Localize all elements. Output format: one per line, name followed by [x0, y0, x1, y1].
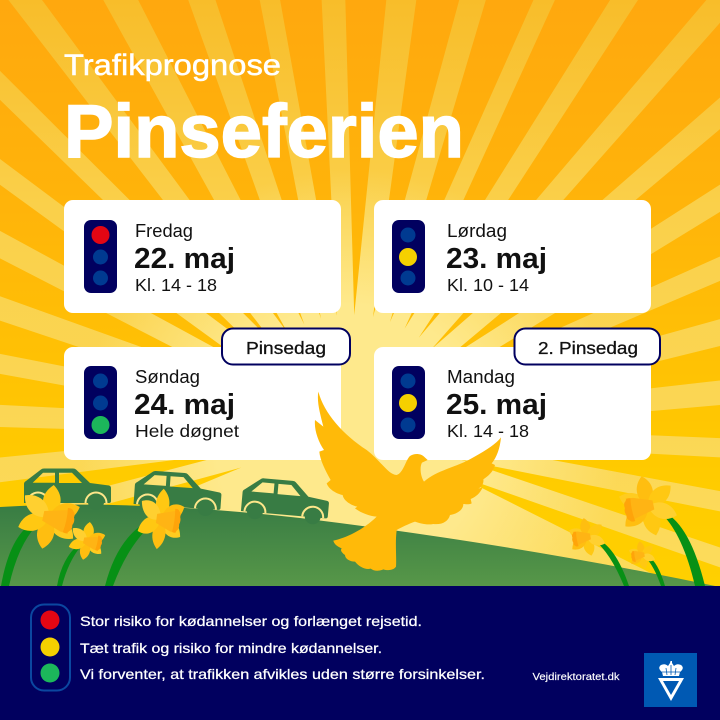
panel: Mandag 25. maj: Kl. 14 - 18 — [447, 421, 529, 441]
panel: Søndag 24. maj: 24. maj — [134, 389, 235, 421]
daffodils right — [565, 470, 705, 586]
panel: Fredag 22. maj: Fredag — [135, 221, 193, 241]
hill — [0, 505, 720, 587]
legend text: Tæt trafik og risiko for mindre kødannelser. — [80, 640, 382, 656]
panel: Lørdag 23. maj: Lørdag — [447, 221, 507, 241]
tag: 2. Pinsedag — [514, 328, 660, 364]
tag: Pinsedag: Pinsedag — [246, 338, 326, 358]
legend text: Stor risiko for kødannelser og forlænget rejsetid. — [80, 613, 422, 629]
bottom legend band — [0, 586, 720, 720]
panel: Lørdag 23. maj: Kl. 10 - 14 — [447, 275, 529, 295]
tag: 2. Pinsedag: 2. Pinsedag — [538, 338, 638, 358]
panel: Lørdag 23. maj: 23. maj — [446, 243, 547, 275]
traffic light: red — [84, 220, 117, 293]
traffic light: yellow — [392, 366, 425, 439]
panel: Søndag 24. maj: Søndag — [135, 367, 200, 387]
logo — [644, 653, 697, 707]
panel: Lørdag 23. maj — [374, 200, 651, 313]
car 1 — [24, 468, 111, 510]
website: Vejdirektoratet.dk — [532, 671, 620, 683]
panel: Fredag 22. maj: Kl. 14 - 18 — [135, 275, 217, 295]
panel: Mandag 25. maj: 25. maj — [446, 389, 547, 421]
panel: Søndag 24. maj: Hele døgnet — [135, 421, 239, 441]
panel: Fredag 22. maj — [64, 200, 341, 313]
traffic light: yellow — [392, 220, 425, 293]
tag: Pinsedag — [222, 328, 350, 364]
car 2 — [133, 470, 223, 517]
traffic light: green — [84, 366, 117, 439]
title: Trafikprognose: Trafikprognose — [64, 49, 281, 82]
panel: Søndag 24. maj — [64, 347, 341, 460]
car 3 — [240, 477, 331, 526]
legend text: Vi forventer, at trafikken afvikles uden større forsinkelser. — [80, 666, 485, 682]
daffodils left — [1, 479, 190, 586]
panel: Mandag 25. maj: Mandag — [447, 367, 515, 387]
panel: Mandag 25. maj — [374, 347, 651, 460]
title: Pinseferien: Pinseferien — [64, 89, 464, 173]
panel: Fredag 22. maj: 22. maj — [134, 243, 235, 275]
dove — [315, 392, 501, 571]
legend traffic light — [31, 604, 70, 690]
legend text — [80, 613, 485, 682]
